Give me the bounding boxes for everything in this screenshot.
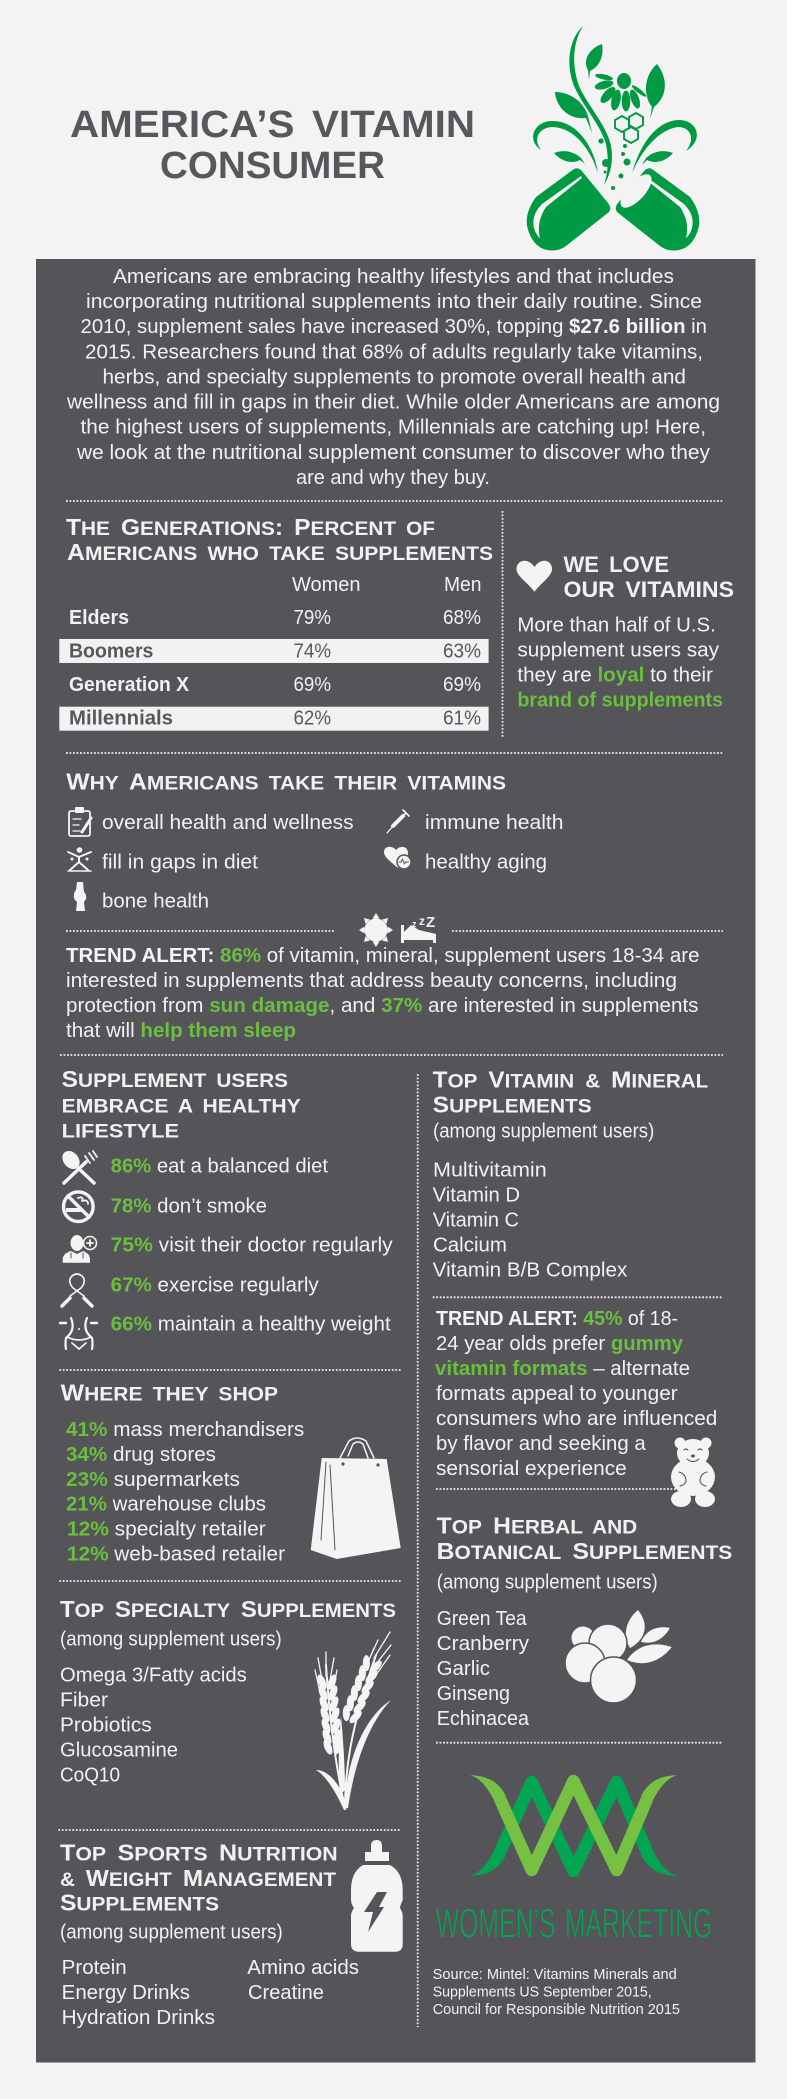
heading: vitamin and mineral: TOP VITAMIN & MINERAL — [433, 1066, 708, 1092]
stat: balanced diet: 86% eat a balanced diet — [111, 1156, 328, 1178]
table column headers: Women — [292, 574, 360, 596]
icon: no smoking — [64, 1192, 93, 1221]
reason: immune health: immune health — [425, 812, 564, 834]
herbal list — [437, 1608, 530, 1730]
heading: where they shop: WHERE THEY SHOP — [61, 1380, 278, 1406]
row: Millennials: 61% — [443, 708, 481, 730]
stat: exercise: 67% exercise regularly — [111, 1275, 319, 1297]
herbal list: Ginseng — [437, 1683, 510, 1705]
sports list: Amino acids — [247, 1957, 359, 1979]
specialty list: Fiber — [60, 1690, 108, 1712]
icon: spoon and fork — [59, 1148, 97, 1183]
heading: herbal and botanical: TOP HERBAL AND — [437, 1512, 637, 1538]
row: Millennials: Millennials — [69, 708, 173, 730]
trend alert: gummy vitamins: 24 year olds prefer gummy — [436, 1333, 684, 1355]
row: Millennials — [59, 707, 489, 731]
loyalty text: More than half of U.S. — [517, 615, 716, 637]
title: AMERICA’S VITAMIN — [70, 104, 475, 146]
icon: shopping bag — [311, 1438, 401, 1559]
icon: bed with zzz: z — [419, 914, 425, 928]
intro text block: wellness and fill in gaps in their diet. While older Americans are among — [66, 392, 720, 414]
sports list: Protein — [62, 1957, 127, 1979]
intro text block: Americans are embracing healthy lifestyles and that includes — [113, 266, 674, 288]
specialty list: Omega 3/Fatty acids — [60, 1665, 247, 1687]
panel: top sports nutrition — [60, 1840, 403, 2029]
heading: sports nutrition: SUPPLEMENTS — [60, 1890, 219, 1916]
source note — [433, 1967, 680, 2018]
vitamin list: Vitamin C — [433, 1210, 519, 1232]
intro text block: herbs, and specialty supplements to promote overall health and — [102, 366, 686, 388]
panel: the generations table — [59, 514, 493, 731]
heading: healthy lifestyle: LIFESTYLE — [62, 1121, 179, 1143]
row: Boomers: 74% — [294, 641, 331, 663]
heading: we love our vitamins — [564, 552, 734, 602]
heading: sports nutrition: & WEIGHT MANAGEMENT — [60, 1865, 336, 1891]
intro text block: incorporating nutritional supplements into their daily routine. Since — [86, 291, 702, 313]
intro text block: are and why they buy. — [296, 467, 490, 489]
loyalty text — [517, 615, 723, 712]
trend alert: gummy vitamins: by flavor and seeking a — [436, 1433, 647, 1455]
heading: herbal and botanical: BOTANICAL SUPPLEMENTS — [437, 1538, 732, 1564]
title — [70, 104, 475, 187]
intro text block: 2010, supplement sales have increased 30%, topping $27.6 billion in — [80, 316, 707, 338]
heading: specialty supplements: TOP SPECIALTY SUPPLEMENTS — [60, 1596, 396, 1622]
trend alert: gummy vitamins: sensorial experience — [436, 1458, 627, 1480]
vitamin list: Vitamin D — [433, 1185, 520, 1207]
vitamin list: Vitamin B/B Complex — [433, 1260, 627, 1282]
intro text block: the highest users of supplements, Millennials are catching up! Here, — [80, 416, 706, 438]
stat: visit doctor: 75% visit their doctor regularly — [111, 1235, 393, 1257]
icon: doctor — [63, 1235, 96, 1263]
table column headers: Men — [444, 574, 482, 596]
row: Generation X: 69% — [294, 674, 331, 696]
row: Generation X: Generation X — [69, 674, 190, 696]
row: Elders: Elders — [69, 607, 129, 629]
table column headers — [292, 574, 482, 596]
trend alert: beauty and sleep — [66, 945, 700, 1042]
trend alert: gummy vitamins: formats appeal to younger — [436, 1383, 678, 1405]
icon: heart with pulse — [384, 847, 411, 869]
stat: healthy weight: 66% maintain a healthy weight — [111, 1314, 391, 1336]
panel: top specialty supplements — [60, 1596, 396, 1810]
row: Millennials: 62% — [294, 708, 331, 730]
icon: capsule with botanicals — [527, 26, 699, 250]
subhead: (among supplement users) — [60, 1921, 283, 1943]
herbal list: Cranberry — [437, 1633, 529, 1655]
icon: bed with zzz: Z — [426, 914, 435, 931]
source note: Source: Mintel: Vitamins Minerals and — [433, 1967, 677, 1983]
retailer list: 34% drug stores — [66, 1444, 216, 1466]
heading: vitamin and mineral: SUPPLEMENTS — [433, 1092, 592, 1118]
panel: where they shop — [61, 1380, 401, 1566]
row: Generation X — [69, 674, 481, 696]
panel: why americans take their vitamins — [66, 768, 564, 913]
title: CONSUMER — [160, 145, 385, 187]
heading: why americans: WHY AMERICANS TAKE THEIR VITAMINS — [66, 768, 506, 794]
trend alert: beauty and sleep: TREND ALERT: 86% of vitamin, mineral, supplement users 18-34 are — [66, 945, 700, 967]
vitamin list: Multivitamin — [433, 1160, 547, 1182]
intro text block: 2015. Researchers found that 68% of adults regularly take vitamins, — [85, 342, 703, 364]
heading: healthy lifestyle: SUPPLEMENT USERS — [62, 1066, 288, 1092]
trend alert: gummy vitamins: TREND ALERT: 45% of 18- — [436, 1308, 678, 1330]
row: Elders: 79% — [294, 607, 331, 629]
heading: sports nutrition: TOP SPORTS NUTRITION — [60, 1840, 338, 1866]
icon: person — [68, 847, 91, 871]
trend alert: beauty and sleep: that will help them sleep — [66, 1020, 296, 1042]
panel: top herbal and botanical supplements — [437, 1512, 732, 1730]
row: Boomers: Boomers — [69, 641, 153, 663]
icon: wheat — [315, 1632, 391, 1810]
icon: sun — [359, 913, 393, 947]
heading: we love our vitamins: WE LOVE — [564, 552, 669, 577]
specialty list: Glucosamine — [60, 1740, 178, 1762]
specialty list — [60, 1665, 247, 1787]
loyalty text: they are loyal to their — [517, 665, 713, 687]
subhead: (among supplement users) — [437, 1571, 658, 1593]
logo: women's marketing — [436, 1775, 712, 1947]
heading: sports nutrition — [60, 1840, 338, 1916]
panel: main dark background — [36, 259, 756, 2062]
intro text block: we look at the nutritional supplement consumer to discover who they — [76, 442, 710, 464]
sports list: Energy Drinks — [62, 1982, 190, 2004]
subhead: (among supplement users) — [60, 1629, 282, 1651]
intro text block — [66, 266, 720, 489]
icon: waist — [60, 1318, 97, 1349]
stat: don't smoke: 78% don’t smoke — [111, 1196, 267, 1218]
panel: we love our vitamins — [516, 552, 734, 712]
reason: overall health: overall health and wellness — [102, 812, 354, 834]
icon: bed with zzz: z — [412, 919, 417, 929]
reason: bone health: bone health — [102, 891, 209, 913]
vitamin list: Calcium — [433, 1235, 507, 1257]
panel: supplement users embrace a healthy lifestyle — [59, 1066, 393, 1349]
trend alert: beauty and sleep: interested in supplements that address beauty concerns, including — [66, 970, 677, 992]
retailer list: 23% supermarkets — [66, 1469, 240, 1491]
row: Boomers — [59, 639, 489, 663]
row: Elders: 68% — [443, 607, 481, 629]
herbal list: Green Tea — [437, 1608, 528, 1630]
loyalty text: supplement users say — [517, 640, 719, 662]
source note: Supplements US September 2015, — [433, 1984, 652, 2000]
sports list: Hydration Drinks — [62, 2007, 215, 2029]
heading: healthy lifestyle — [62, 1066, 301, 1143]
heading: healthy lifestyle: EMBRACE A HEALTHY — [62, 1096, 301, 1118]
herbal list: Garlic — [437, 1658, 490, 1680]
heading: generations: THE GENERATIONS : PERCENT OF — [66, 514, 435, 540]
specialty list: Probiotics — [60, 1715, 152, 1737]
trend alert: gummy vitamins — [435, 1308, 717, 1480]
icon: bone joint — [74, 882, 86, 911]
retailer list — [66, 1419, 304, 1566]
icon: gummy bear — [671, 1438, 715, 1507]
reason: healthy aging: healthy aging — [425, 852, 547, 874]
icon: berries and leaves — [565, 1610, 672, 1703]
subhead: (among supplement users) — [433, 1120, 654, 1142]
icon: jump rope — [62, 1274, 92, 1306]
panel: top vitamin and mineral supplements — [433, 1066, 708, 1282]
icon: sports bottle — [351, 1840, 403, 1952]
row: Generation X: 69% — [443, 674, 481, 696]
logo mark — [470, 1775, 677, 1876]
trend alert: gummy vitamins: vitamin formats – alternate — [435, 1358, 690, 1380]
sports list — [62, 1957, 359, 2029]
herbal list: Echinacea — [437, 1708, 530, 1730]
vitamin list — [433, 1160, 627, 1282]
heading: vitamin and mineral — [433, 1066, 708, 1118]
retailer list: 41% mass merchandisers — [66, 1419, 304, 1441]
row: Elders — [69, 607, 481, 629]
icon: syringe — [387, 810, 409, 833]
heading: we love our vitamins: OUR VITAMINS — [564, 577, 734, 602]
heading: generations — [66, 514, 493, 565]
icon: clipboard — [69, 807, 91, 836]
icon: heart — [516, 561, 552, 592]
heading: herbal and botanical — [437, 1512, 732, 1564]
heading: generations: AMERICANS WHO TAKE SUPPLEMENTS — [67, 539, 493, 565]
retailer list: 12% specialty retailer — [67, 1519, 266, 1541]
specialty list: CoQ10 — [60, 1765, 120, 1787]
row: Boomers: 63% — [443, 641, 481, 663]
trend alert: beauty and sleep: protection from sun damage, and 37% are interested in supplements — [66, 995, 698, 1017]
icon: bed with zzz — [401, 914, 436, 943]
retailer list: 21% warehouse clubs — [66, 1494, 266, 1516]
sports list: Creatine — [248, 1982, 324, 2004]
source note: Council for Responsible Nutrition 2015 — [433, 2002, 680, 2018]
reason: fill in gaps: fill in gaps in diet — [102, 852, 258, 874]
loyalty text: brand of supplements — [517, 690, 723, 712]
retailer list: 12% web-based retailer — [67, 1544, 285, 1566]
trend alert: gummy vitamins: consumers who are influenced — [436, 1408, 717, 1430]
